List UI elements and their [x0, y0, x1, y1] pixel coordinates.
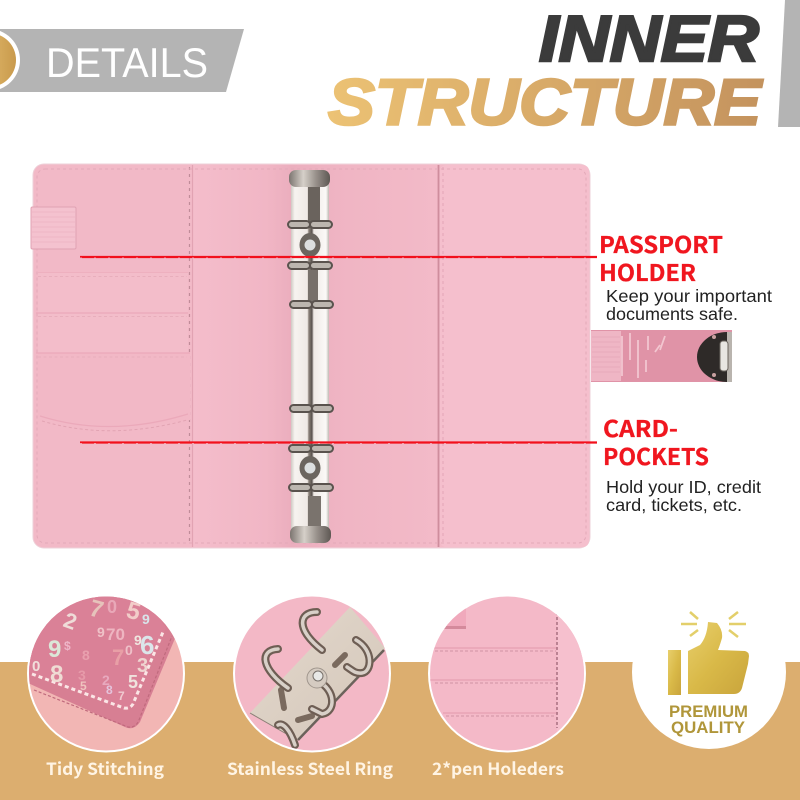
holographic numbers: 5 — [128, 672, 138, 692]
center panel — [193, 165, 438, 547]
holographic numbers: 8 — [106, 683, 113, 697]
callout: card pockets — [603, 410, 761, 515]
premium quality badge: PREMIUM — [669, 703, 748, 721]
details banner — [0, 29, 244, 92]
holographic numbers: 7 — [118, 689, 125, 703]
holographic numbers — [32, 595, 154, 703]
callout: passport holder: Keep your important — [606, 286, 772, 306]
holographic numbers: 9 — [134, 632, 142, 648]
premium quality badge — [632, 595, 786, 749]
callout: passport holder — [599, 226, 772, 324]
label: pen holders: 2*pen Holeders — [432, 755, 564, 780]
holographic numbers: 5 — [123, 597, 143, 626]
elastic strap — [31, 207, 76, 249]
card pockets — [36, 272, 190, 431]
holographic numbers: 9 — [97, 624, 105, 640]
holographic numbers: 9 — [142, 611, 150, 627]
premium quality badge: QUALITY — [671, 719, 745, 737]
callout: passport holder: documents safe. — [606, 304, 738, 324]
detail circle: stainless steel ring — [233, 596, 391, 752]
binder cover — [33, 164, 590, 548]
holographic numbers: $ — [64, 639, 71, 653]
title: INNER — [539, 2, 759, 75]
detail circle: pen holders — [428, 596, 586, 752]
holographic numbers: 0 — [107, 597, 117, 617]
gold band — [0, 662, 800, 800]
holographic numbers: 70 — [106, 625, 125, 644]
details banner: DETAILS — [46, 39, 208, 86]
callout: passport holder: PASSPORT — [599, 226, 723, 260]
label: tidy stitching: Tidy Stitching — [46, 755, 164, 780]
holographic numbers: 9 — [48, 636, 61, 663]
label: stainless steel ring: Stainless Steel Ring — [227, 755, 393, 780]
rings — [288, 221, 333, 491]
callout: card pockets: card, tickets, etc. — [606, 495, 742, 515]
callout: passport holder: HOLDER — [599, 254, 696, 288]
callout: card pockets: Hold your ID, credit — [606, 477, 761, 497]
callout: card pockets: POCKETS — [603, 438, 709, 472]
holographic numbers: 7 — [112, 645, 124, 670]
callout: card pockets: CARD- — [603, 410, 678, 444]
icon: thumbs up — [668, 612, 749, 695]
title — [328, 2, 763, 138]
holographic numbers: 5 — [80, 679, 87, 693]
holographic numbers: 0 — [125, 642, 133, 658]
holographic numbers: 0 — [32, 658, 40, 675]
binder — [31, 164, 732, 548]
holographic numbers: 3 — [78, 667, 86, 683]
rivets — [300, 233, 320, 480]
holographic numbers: 8 — [50, 661, 63, 688]
right panel — [440, 165, 589, 547]
holographic numbers: 6 — [140, 630, 154, 660]
holographic numbers: 8 — [82, 647, 90, 663]
detail circle: tidy stitching — [27, 596, 185, 752]
binder rings — [265, 612, 370, 745]
holographic numbers: 3 — [137, 655, 148, 677]
callout line: card pockets — [80, 442, 597, 444]
stitches — [32, 632, 163, 708]
ring mechanism — [288, 170, 333, 543]
title: STRUCTURE — [328, 66, 763, 138]
clasp tab — [591, 330, 732, 382]
corner grey bar — [778, 0, 800, 127]
holographic numbers: 2 — [102, 672, 110, 688]
holographic numbers: 2 — [60, 607, 80, 635]
holographic numbers: 7 — [86, 595, 106, 624]
left panel — [34, 165, 190, 547]
callout line: passport holder — [80, 257, 597, 258]
